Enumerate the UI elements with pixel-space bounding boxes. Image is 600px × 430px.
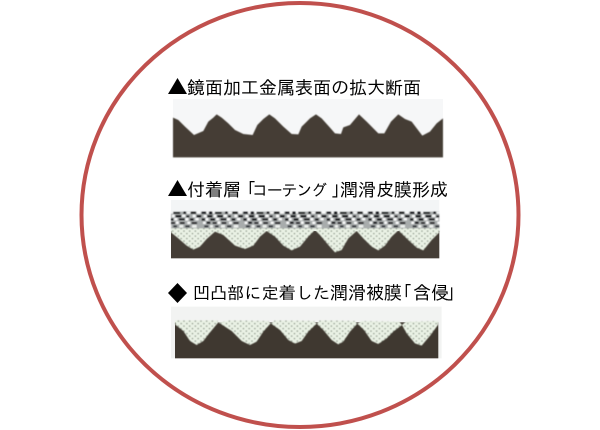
section 2: coating lubricating film: [168, 180, 448, 258]
heading: section 3: [168, 283, 464, 303]
heading: section 2: 潤滑皮膜形成: [340, 180, 448, 199]
section 3: lubricating film impregnated in recesses: [168, 283, 464, 358]
heading: section 2: コーテング: [252, 182, 327, 198]
cross-section image: film in recesses: [171, 307, 442, 358]
heading: section 2: 付着層: [187, 181, 241, 199]
heading: section 3: 潤滑被膜: [330, 283, 402, 302]
heading: section 3: 「: [394, 284, 412, 302]
heading: section 3: 」: [446, 284, 464, 302]
heading: section 1: 鏡面加工金属表面の拡大断面: [187, 78, 421, 97]
heading: section 2: 」: [331, 181, 349, 199]
heading: section 2: 「: [238, 181, 256, 199]
cross-section image: bare metal surface: [173, 99, 443, 157]
heading: section 3: 凹凸部に定着した: [193, 284, 330, 302]
section 1: mirror-finished metal surface: [168, 78, 443, 157]
heading: section 2: [168, 180, 448, 199]
red circle outline: [82, 3, 518, 427]
heading: section 3: 含侵: [413, 283, 449, 302]
cross-section image: coating layer over surface: [171, 200, 439, 258]
